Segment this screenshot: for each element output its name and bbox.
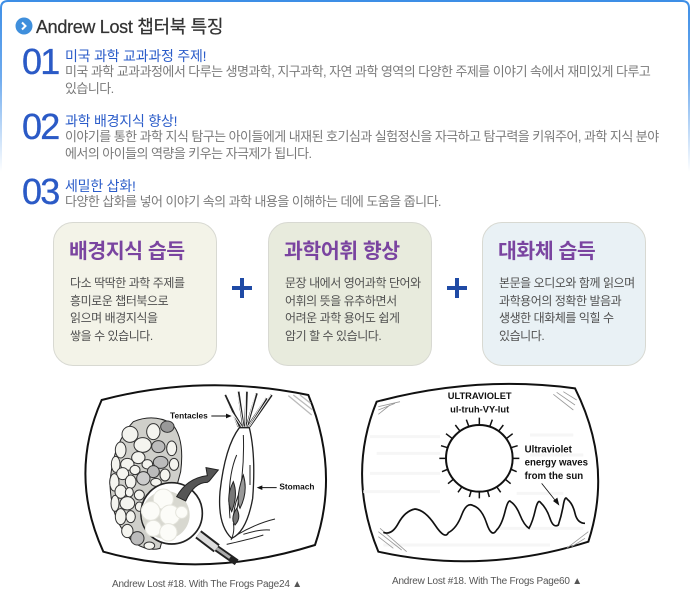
faint show-through text (363, 435, 583, 545)
body 01 (65, 64, 650, 96)
panel text: 본문을 오디오와 함께 읽으며 (499, 276, 635, 290)
number 03: 03 (22, 171, 58, 212)
heading 01: 미국 과학 교과과정 주제! (65, 48, 206, 64)
panel: science vocabulary (268, 222, 432, 366)
label energy waves: from the sun (525, 471, 583, 482)
body 01: 있습니다. (65, 81, 114, 96)
label ultraviolet: ul-truh-VY-lut (450, 405, 509, 415)
body 02 (65, 129, 659, 161)
panel text: 어휘의 뜻을 유추하면서 (285, 294, 397, 308)
corner shading (288, 395, 313, 415)
panel text: 있습니다. (499, 329, 544, 343)
label energy waves (525, 444, 588, 482)
panel text (499, 276, 635, 343)
curved arrow (177, 468, 218, 501)
number 01: 01 (22, 41, 58, 82)
icon: round arrow bullet (16, 18, 32, 34)
panel text: 흥미로운 챕터북으로 (70, 294, 168, 308)
illustration: frog cells and hydra (84, 384, 328, 566)
panel: background knowledge (53, 222, 217, 366)
panel text: 생생한 대화체를 익힐 수 (499, 311, 614, 325)
label ultraviolet: ULTRAVIOLET (448, 391, 512, 401)
pointer arrow (542, 483, 559, 506)
label tentacles: Tentacles (170, 410, 208, 420)
panel text: 다소 딱딱한 과학 주제를 (70, 276, 185, 290)
panel: dialogue (482, 222, 646, 366)
panel text (285, 276, 421, 343)
number 02: 02 (22, 106, 58, 147)
label tentacles (170, 410, 232, 420)
body 02: 이야기를 통한 과학 지식 탐구는 아이들에게 내재된 호기심과 실험정신을 자극하고 탐구력을 키워주어, 과학 지식 분야 (65, 129, 659, 144)
tv frame (362, 384, 598, 561)
panel text: 읽으며 배경지식을 (70, 311, 158, 325)
hydra (220, 392, 275, 544)
plus icon (447, 278, 467, 298)
body 03: 다양한 삽화를 넣어 이야기 속의 과학 내용을 이해하는 데에 도움을 줍니다. (65, 194, 441, 209)
title text: Andrew Lost 챕터북 특징 (36, 17, 223, 37)
wave (383, 498, 585, 535)
magnifier (141, 483, 237, 562)
feature 03 (22, 171, 441, 212)
feature 01 (22, 41, 650, 96)
caption left: Andrew Lost #18. With The Frogs Page24 ▲ (112, 579, 302, 590)
illustration: ultraviolet waves (361, 382, 600, 562)
feature 02 (22, 106, 659, 161)
body 01: 미국 과학 교과과정에서 다루는 생명과학, 지구과학, 자연 과학 영역의 다양한 주제를 이야기 속에서 재미있게 다루고 (65, 64, 650, 79)
panel text: 과학용어의 정확한 발음과 (499, 294, 621, 308)
cell mass (110, 418, 182, 549)
label stomach: Stomach (279, 481, 315, 491)
sun (439, 418, 519, 498)
label stomach (257, 481, 315, 491)
title (16, 17, 223, 37)
panel heading: 배경지식 습득 (69, 240, 185, 263)
panel heading: 과학어휘 향상 (284, 240, 400, 263)
label energy waves: energy waves (525, 458, 588, 469)
body 02: 에서의 아이들의 역량을 키우는 자극제가 됩니다. (65, 146, 312, 161)
panel text: 암기 할 수 있습니다. (285, 329, 381, 343)
caption right: Andrew Lost #18. With The Frogs Page60 ▲ (392, 576, 582, 587)
tv frame (85, 385, 326, 564)
panel text: 쌓을 수 있습니다. (70, 329, 153, 343)
label energy waves: Ultraviolet (525, 444, 573, 455)
heading 02: 과학 배경지식 향상! (65, 113, 177, 129)
label ultraviolet (448, 391, 512, 415)
panel text (70, 276, 185, 343)
panel text: 어려운 과학 용어도 쉽게 (285, 311, 400, 325)
panel heading: 대화체 습득 (498, 240, 595, 263)
panel text: 문장 내에서 영어과학 단어와 (285, 276, 421, 290)
plus icon (232, 278, 252, 298)
heading 03: 세밀한 삽화! (65, 178, 136, 194)
corner hatching (378, 392, 588, 552)
